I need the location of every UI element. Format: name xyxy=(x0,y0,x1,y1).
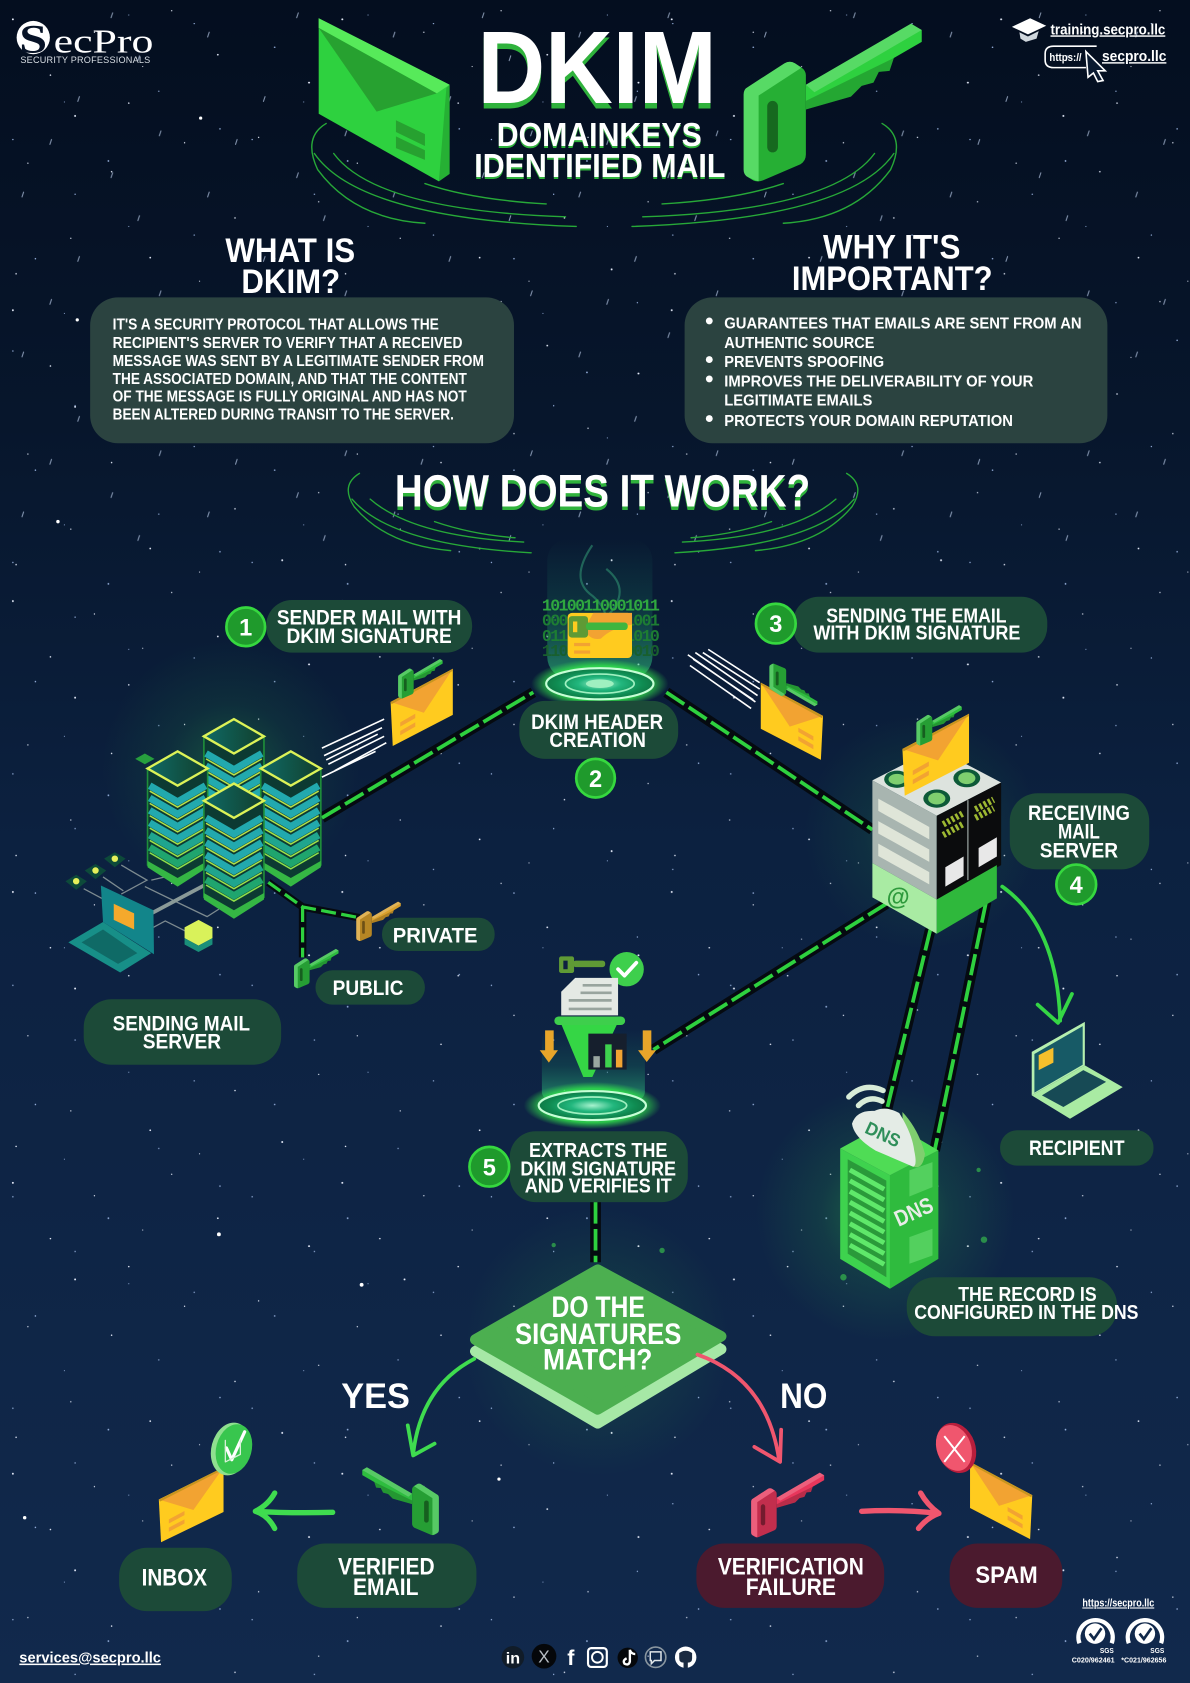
icon: url box with cursor: https:// xyxy=(1049,52,1082,64)
social icons: X xyxy=(538,1647,550,1667)
decision diamond: SIGNATURES xyxy=(515,1318,681,1351)
icon: server tower left xyxy=(148,751,208,887)
arrow: failure to spam xyxy=(862,1493,939,1528)
cloud xyxy=(902,1112,925,1167)
pill: sending mail server: SENDING MAIL xyxy=(113,1011,250,1035)
connector lines xyxy=(268,692,986,1262)
glows behind icons xyxy=(102,639,1041,1476)
heading: what is DKIM xyxy=(225,232,355,301)
icon: DNS server: DNS xyxy=(891,1192,937,1231)
pill: sending mail server xyxy=(84,999,281,1065)
icon: DKIM header creation platform: 10100110001011 xyxy=(542,597,660,616)
social icons xyxy=(502,1644,696,1670)
logo: SecPro xyxy=(17,18,153,65)
pill: DNS record xyxy=(907,1277,1138,1336)
nodes and cube xyxy=(65,753,212,952)
step 3 label xyxy=(756,597,1047,653)
pill: DNS record: THE RECORD IS xyxy=(958,1284,1097,1306)
subtitle: DomainKeys Identified Mail: DOMAINKEYS xyxy=(497,119,702,156)
heading: why it's important: IMPORTANT? xyxy=(792,260,993,298)
wifi xyxy=(849,1087,883,1106)
icon: public key xyxy=(294,949,339,988)
top-right links xyxy=(1012,18,1166,82)
icon: recipient laptop xyxy=(1032,1022,1123,1119)
icon: big green envelope xyxy=(319,18,450,181)
certification badges: https://secpro.llc xyxy=(1082,1597,1154,1609)
key and check xyxy=(559,956,574,973)
subtitle: DomainKeys Identified Mail: DOMAINKEYS xyxy=(497,117,702,154)
icon: receiving mail server: @ xyxy=(887,885,910,911)
pill: verified email: VERIFIED xyxy=(338,1555,435,1581)
heading: how does it work: HOW DOES IT WORK? xyxy=(395,469,810,520)
step 4 label: SERVER xyxy=(1040,839,1119,863)
subtitle: DomainKeys Identified Mail: IDENTIFIED MAIL xyxy=(474,150,725,187)
decision diamond: MATCH? xyxy=(543,1344,652,1377)
pill: verification failure: VERIFICATION xyxy=(718,1555,864,1581)
icon: failed key xyxy=(751,1473,824,1537)
arrow: yes branch xyxy=(408,1359,474,1455)
pill: private key: PRIVATE xyxy=(393,923,478,947)
header arcs xyxy=(312,123,896,226)
step 1 label: 1 xyxy=(239,615,252,641)
certification badges: SGS xyxy=(1100,1646,1114,1655)
certification badges: C020/962461 xyxy=(1072,1658,1115,1665)
pill: verification failure xyxy=(696,1543,884,1608)
social icons: in xyxy=(506,1650,520,1668)
icon: spam envelope with x xyxy=(929,1417,1032,1539)
icon: inbox envelope with check xyxy=(159,1418,258,1542)
panel: why it's important: LEGITIMATE EMAILS xyxy=(724,392,873,410)
step 1 label: SENDER MAIL WITH xyxy=(277,606,461,630)
icon: DKIM header creation platform: 00010110111001 xyxy=(542,612,660,631)
icon: server tower front xyxy=(204,784,264,919)
step 2 label xyxy=(519,701,678,797)
arrow: to recipient xyxy=(1002,887,1072,1023)
panel: what is DKIM: MESSAGE WAS SENT BY A LEGITIMATE SENDER FROM xyxy=(113,352,484,370)
speed lines: step 3 xyxy=(688,649,760,708)
logo: SecPro: S xyxy=(19,18,47,62)
step 2 label: CREATION xyxy=(549,728,646,752)
pill: recipient xyxy=(1000,1130,1154,1166)
icon: signed envelope step 3 xyxy=(761,664,823,760)
icon: DNS server xyxy=(840,1087,938,1289)
panel: what is DKIM: BEEN ALTERED DURING TRANSIT TO THE SERVER. xyxy=(113,406,454,424)
pill: inbox xyxy=(119,1548,232,1611)
step 5 label: 5 xyxy=(483,1155,496,1181)
icon: signed envelope step 1 xyxy=(391,659,453,746)
label: yes: YES xyxy=(341,1376,410,1416)
logo: SecPro: SECURITY PROFESSIONALS xyxy=(20,55,150,65)
step 2 label: DKIM HEADER xyxy=(531,710,664,734)
step 4 label: 4 xyxy=(1070,873,1083,899)
step 1 label: DKIM SIGNATURE xyxy=(287,624,452,648)
panel: why it's important: PREVENTS SPOOFING xyxy=(724,353,884,371)
circuit lines xyxy=(84,865,219,932)
step 4 label: MAIL xyxy=(1058,819,1100,843)
subtitle: DomainKeys Identified Mail xyxy=(474,117,725,187)
icon: verified key xyxy=(362,1467,439,1535)
pill: verified email xyxy=(297,1543,476,1608)
icon: receiving mail server xyxy=(872,705,1001,934)
arrow: no branch xyxy=(697,1355,781,1462)
pill: recipient: RECIPIENT xyxy=(1029,1136,1125,1160)
icon: private key xyxy=(356,902,401,941)
server top xyxy=(872,748,1001,816)
decision diamond: DO THE xyxy=(552,1291,645,1324)
panel: what is DKIM: OF THE MESSAGE IS FULLY ORIGINAL AND HAS NOT xyxy=(113,387,467,405)
title: DKIM: DKIM xyxy=(478,15,717,130)
icon: big green key xyxy=(744,24,922,181)
heading: why it's important xyxy=(792,229,993,298)
pill: sending mail server: SERVER xyxy=(143,1030,221,1054)
server right face xyxy=(937,782,1001,899)
icon: laptop xyxy=(68,886,154,972)
sending mail server illustration xyxy=(65,719,321,972)
logo: SecPro: ecPro xyxy=(54,23,153,61)
certification badges: *C021/962656 xyxy=(1121,1658,1167,1665)
step 5 label: DKIM SIGNATURE xyxy=(520,1158,676,1180)
step 3 label: WITH DKIM SIGNATURE xyxy=(813,623,1020,645)
pill: public key xyxy=(315,970,425,1005)
heading arcs: how does it work xyxy=(348,473,858,553)
link: main site: secpro.llc xyxy=(1102,49,1166,65)
pill: private key xyxy=(382,918,495,951)
certification badges: SGS xyxy=(1150,1646,1164,1655)
pill: public key: PUBLIC xyxy=(333,976,403,1000)
panel: why it's important xyxy=(685,297,1107,443)
pill: DNS record: CONFIGURED IN THE DNS xyxy=(914,1302,1138,1324)
certification badges xyxy=(1072,1597,1167,1665)
step 3 label: SENDING THE EMAIL xyxy=(826,606,1007,628)
icon: DKIM header creation platform: 01101001011010 xyxy=(542,627,660,646)
pill: spam xyxy=(950,1543,1062,1608)
icon: DKIM header creation platform xyxy=(531,539,669,708)
icon: verification funnel xyxy=(524,952,661,1129)
title: DKIM: DKIM xyxy=(478,10,717,125)
link: training site: training.secpro.llc xyxy=(1051,22,1165,38)
server base xyxy=(872,863,937,934)
step 3 label: 3 xyxy=(769,612,782,638)
panel: why it's important: AUTHENTIC SOURCE xyxy=(724,334,875,352)
step 5 label xyxy=(469,1131,688,1202)
icon: url box with cursor xyxy=(1045,46,1105,82)
heading: why it's important: WHY IT'S xyxy=(823,229,960,267)
panel: what is DKIM xyxy=(90,297,514,443)
panel: why it's important: PROTECTS YOUR DOMAIN REPUTATION xyxy=(724,412,1013,430)
funnel xyxy=(554,1016,625,1025)
arrow: verified to inbox xyxy=(255,1493,333,1528)
social icons: f xyxy=(567,1646,575,1670)
footer email: services@secpro.llc xyxy=(19,1650,161,1667)
icon: server tower back xyxy=(204,719,264,854)
pill: verified email: EMAIL xyxy=(353,1575,418,1601)
speed lines: step 1 xyxy=(322,719,386,777)
arrows xyxy=(540,1030,558,1063)
panel: what is DKIM: THE ASSOCIATED DOMAIN, AND THAT THE CONTENT xyxy=(113,370,467,388)
server left face xyxy=(872,780,937,899)
pill: inbox: INBOX xyxy=(142,1565,207,1591)
icon: server tower right xyxy=(261,751,321,887)
step 4 label xyxy=(1010,793,1149,904)
panel: what is DKIM: RECIPIENT'S SERVER TO VERIFY THAT A RECEIVED xyxy=(113,334,462,352)
heading: what is DKIM: DKIM? xyxy=(241,263,340,301)
label: no: NO xyxy=(780,1376,827,1416)
pill: verification failure: FAILURE xyxy=(746,1575,836,1601)
envelope on server xyxy=(902,714,969,796)
icon: graduation cap xyxy=(1012,18,1046,42)
document xyxy=(561,978,618,1015)
heading: what is DKIM: WHAT IS xyxy=(225,232,355,270)
step 1 label xyxy=(226,600,472,653)
step 5 label: AND VERIFIES IT xyxy=(525,1175,672,1197)
panel: why it's important: IMPROVES THE DELIVERABILITY OF YOUR xyxy=(724,372,1034,390)
subtitle: DomainKeys Identified Mail: IDENTIFIED MAIL xyxy=(474,148,725,185)
heading: how does it work: HOW DOES IT WORK? xyxy=(395,466,810,517)
pill: spam: SPAM xyxy=(975,1563,1038,1589)
decision diamond xyxy=(475,1270,721,1423)
rack xyxy=(840,1148,890,1289)
step 2 label: 2 xyxy=(589,767,602,793)
icon: DKIM header creation platform: 11010100110010 xyxy=(542,642,660,661)
panel: why it's important: GUARANTEES THAT EMAILS ARE SENT FROM AN xyxy=(724,314,1082,332)
icon: DNS server: DNS xyxy=(862,1117,904,1151)
step 5 label: EXTRACTS THE xyxy=(529,1140,667,1162)
step 4 label: RECEIVING xyxy=(1028,801,1130,825)
panel: what is DKIM: IT'S A SECURITY PROTOCOL THAT ALLOWS THE xyxy=(113,316,439,334)
